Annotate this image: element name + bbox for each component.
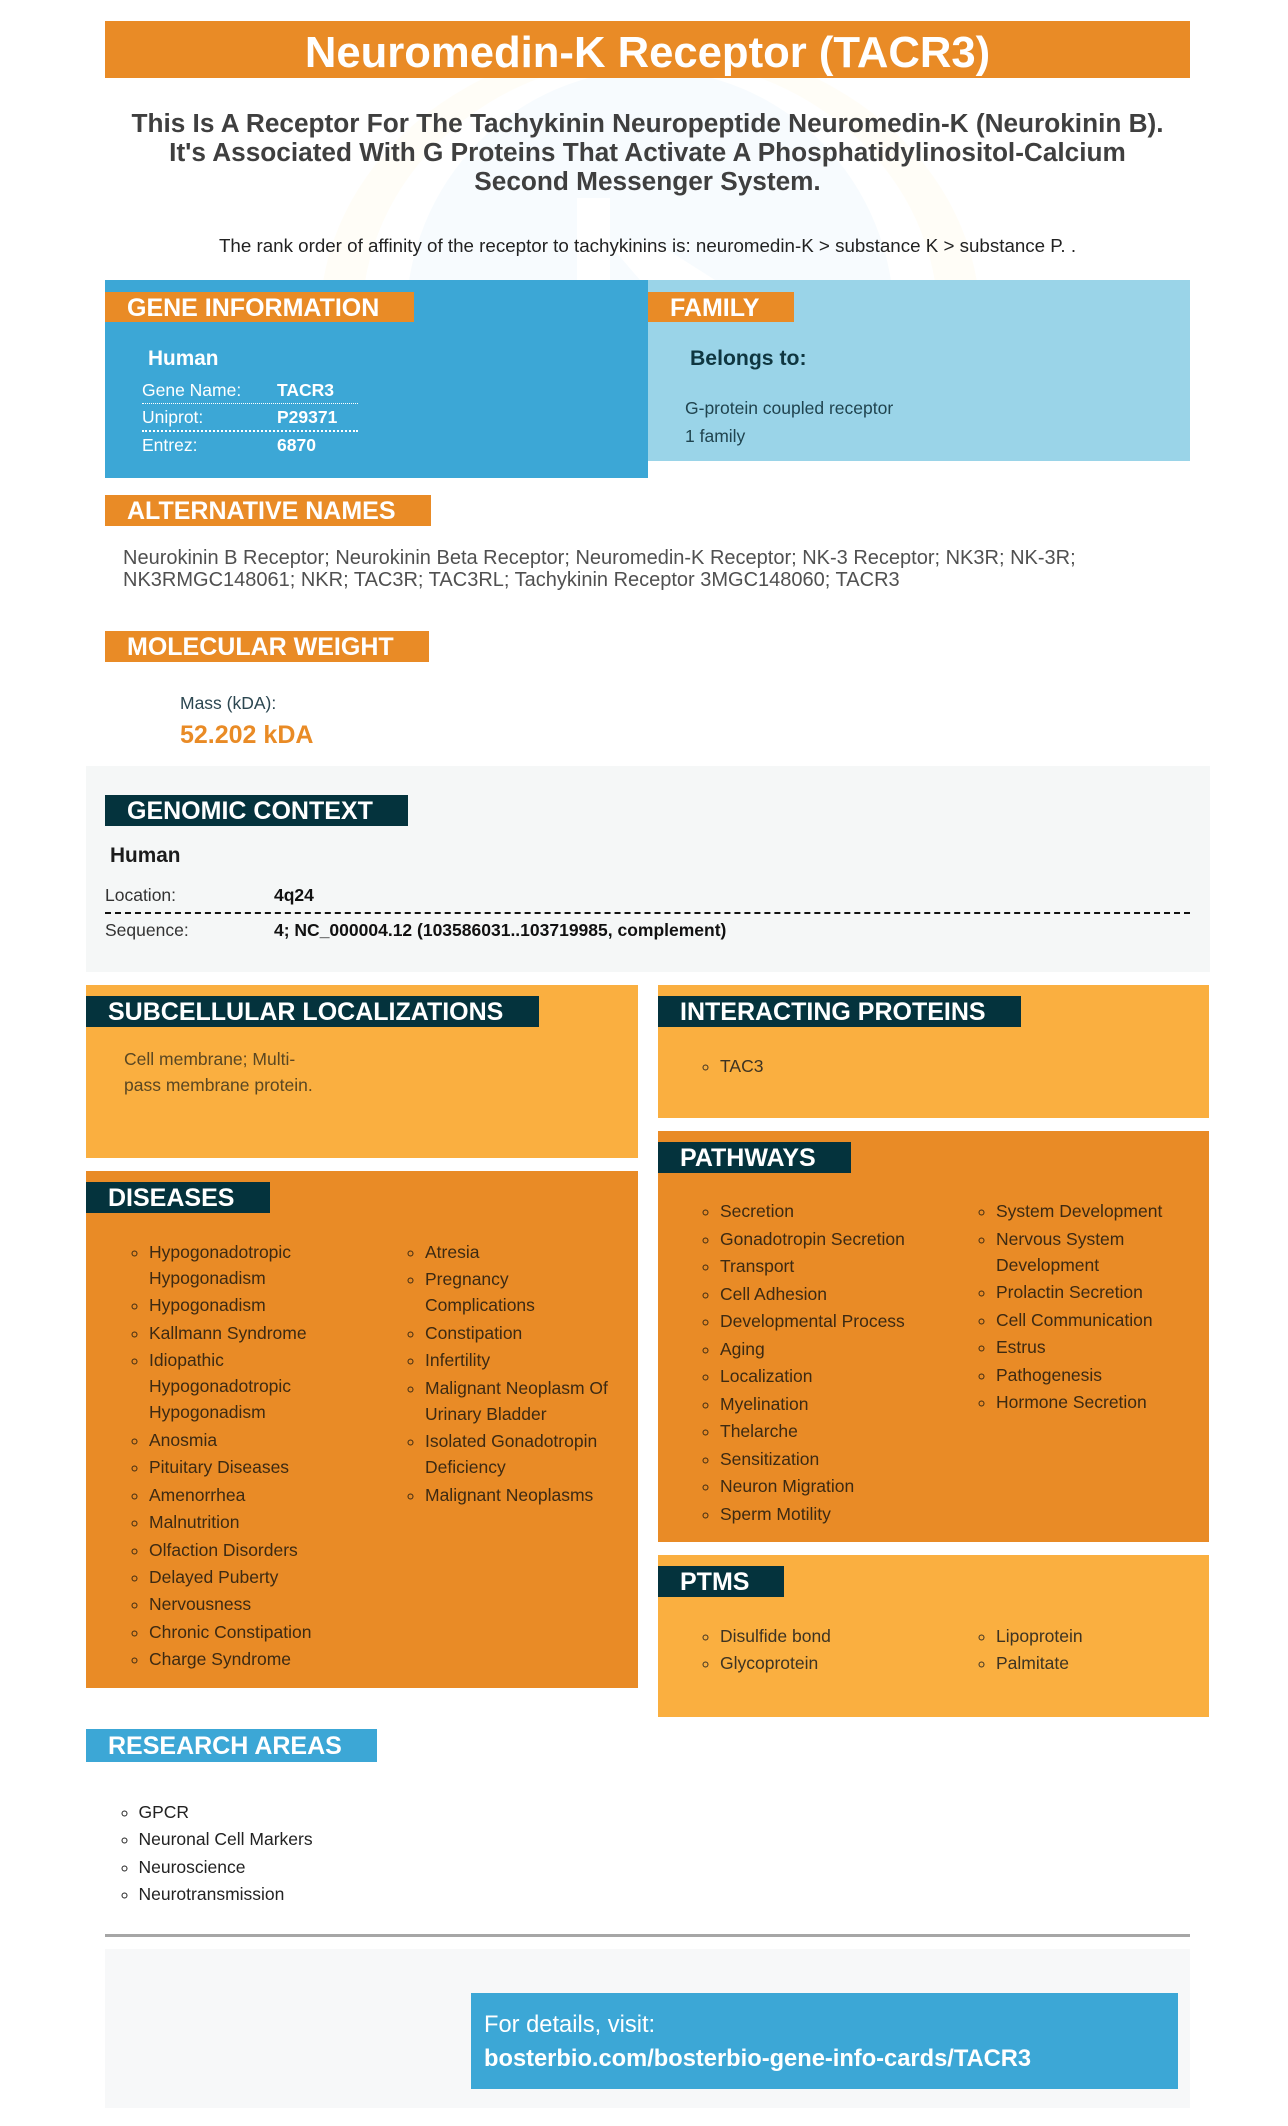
alternative names text (123, 547, 1076, 591)
localization text: Cell membrane; Multi- (124, 1049, 295, 1069)
title: Neuromedin-K Receptor (TACR3) (305, 28, 990, 77)
list: pathways column 1: Secretion (720, 1201, 794, 1221)
list: diseases column 1: Idiopathic Hypogonadotropic Hypogonadism (149, 1350, 291, 1422)
list: ptms column 1: Disulfide bond (720, 1626, 831, 1646)
heading: ptms (658, 1566, 784, 1597)
list: pathways column 2: Cell Communication (996, 1310, 1153, 1330)
location row: 4q24 (274, 885, 314, 905)
location row: Location: (105, 885, 176, 905)
family text: 1 family (685, 426, 745, 446)
panel: diseases (86, 1171, 638, 1688)
heading: research areas (86, 1729, 377, 1762)
localization text (124, 1049, 313, 1095)
list: diseases column 2: Constipation (425, 1323, 522, 1343)
list: ptms column 2: Lipoprotein (996, 1626, 1083, 1646)
alternative names text: Neurokinin B Receptor; Neurokinin Beta Receptor; Neuromedin-K Receptor; NK-3 Receptor; NK3R; NK-3R; (123, 547, 1076, 569)
list: pathways column 1: Localization (720, 1366, 812, 1386)
footer panel (105, 1949, 1190, 2108)
list: pathways column 1: Gonadotropin Secretion (720, 1229, 905, 1249)
list: diseases column 1: Hypogonadotropic Hypogonadism (149, 1242, 291, 1288)
list: pathways column 1 (702, 1201, 905, 1524)
heading: alternative names: ALTERNATIVE NAMES (127, 497, 396, 525)
heading: diseases: DISEASES (108, 1184, 234, 1212)
heading: gene information: GENE INFORMATION (127, 294, 379, 322)
gene table: Gene Name: (142, 380, 241, 400)
title (105, 21, 1190, 78)
localization text: pass membrane protein. (124, 1075, 313, 1095)
subtitle (131, 108, 1164, 196)
callout label: For details, visit: (484, 2012, 655, 2038)
list: diseases column 1: Pituitary Diseases (149, 1457, 289, 1477)
list: research areas: Neuronal Cell Markers (138, 1829, 313, 1849)
panel: ptms (658, 1555, 1209, 1717)
heading: subcellular localizations: SUBCELLULAR LOCALIZATIONS (108, 998, 503, 1026)
gene table: Entrez: (142, 435, 197, 455)
mass label: Mass (kDA): (180, 693, 276, 713)
list: diseases column 1: Malnutrition (149, 1512, 239, 1532)
list: diseases column 1: Anosmia (149, 1430, 217, 1450)
list: pathways column 2: Pathogenesis (996, 1365, 1102, 1385)
list: diseases column 1: Amenorrhea (149, 1485, 245, 1505)
family text (685, 398, 893, 446)
gene table: P29371 (277, 407, 337, 427)
list: ptms column 1 (702, 1626, 831, 1673)
list: diseases column 1: Delayed Puberty (149, 1567, 278, 1587)
mass value: 52.202 kDA (180, 721, 313, 749)
heading: ptms: PTMS (680, 1568, 749, 1596)
list: diseases column 1: Nervousness (149, 1594, 251, 1614)
species label: Human (148, 347, 218, 370)
heading: pathways (658, 1142, 851, 1173)
heading: pathways: PATHWAYS (680, 1144, 816, 1172)
list: pathways column 1: Cell Adhesion (720, 1284, 827, 1304)
heading: diseases (86, 1182, 270, 1213)
list: pathways column 1: Neuron Migration (720, 1476, 854, 1496)
panel: gene information (105, 280, 648, 478)
list: diseases column 1: Hypogonadism (149, 1295, 266, 1315)
list: diseases column 2: Atresia (425, 1242, 479, 1262)
list: research areas: Neuroscience (138, 1857, 246, 1877)
gene table: Uniprot: (142, 407, 203, 427)
panel: pathways (658, 1131, 1209, 1542)
list: pathways column 1: Thelarche (720, 1421, 798, 1441)
list: ptms column 1: Glycoprotein (720, 1653, 818, 1673)
list: diseases column 2: Malignant Neoplasm Of Urinary Bladder (425, 1378, 608, 1424)
background watermark (0, 78, 1288, 280)
subtitle: It's Associated With G Proteins That Activate A Phosphatidylinositol-Calcium (169, 137, 1126, 167)
gene table: 6870 (277, 435, 316, 455)
list: ptms column 2 (978, 1626, 1083, 1673)
sequence row: Sequence: (105, 920, 189, 940)
list: pathways column 1: Developmental Process (720, 1311, 905, 1331)
heading: genomic context: GENOMIC CONTEXT (127, 797, 373, 825)
list: diseases column 2: Malignant Neoplasms (425, 1485, 593, 1505)
panel: interacting proteins (658, 985, 1209, 1118)
list: pathways column 2: Prolactin Secretion (996, 1282, 1143, 1302)
location row (105, 885, 314, 905)
list: pathways column 2: Estrus (996, 1337, 1046, 1357)
subtitle: Second Messenger System. (474, 166, 821, 196)
list: diseases column 1: Olfaction Disorders (149, 1540, 298, 1560)
panel: family (648, 280, 1190, 461)
gene table (142, 380, 358, 455)
sequence row: 4; NC_000004.12 (103586031..103719985, complement) (274, 920, 726, 940)
list: diseases column 1 (132, 1242, 311, 1669)
list: pathways column 1: Sensitization (720, 1449, 819, 1469)
list: diseases column 1: Charge Syndrome (149, 1649, 291, 1669)
heading: family: FAMILY (670, 294, 759, 322)
heading: research areas: RESEARCH AREAS (108, 1732, 342, 1760)
list: interacting proteins: TAC3 (720, 1056, 763, 1076)
list: pathways column 1: Transport (720, 1256, 794, 1276)
list: diseases column 1: Kallmann Syndrome (149, 1323, 307, 1343)
callout url: bosterbio.com/bosterbio-gene-info-cards/TACR3 (484, 2046, 1031, 2072)
callout: details link (471, 1993, 1178, 2089)
subtitle: This Is A Receptor For The Tachykinin Neuropeptide Neuromedin-K (Neurokinin B). (131, 108, 1164, 138)
heading: molecular weight: MOLECULAR WEIGHT (127, 633, 394, 661)
list: diseases column 2: Isolated Gonadotropin Deficiency (425, 1431, 597, 1477)
list: research areas: Neurotransmission (138, 1884, 284, 1904)
panel: genomic context (86, 766, 1210, 972)
list: pathways column 2: System Development (996, 1201, 1162, 1221)
alternative names text: NK3RMGC148061; NKR; TAC3R; TAC3RL; Tachykinin Receptor 3MGC148060; TACR3 (123, 569, 900, 591)
list: pathways column 1: Myelination (720, 1394, 809, 1414)
list: pathways column 2: Hormone Secretion (996, 1392, 1147, 1412)
list: research areas: GPCR (138, 1802, 189, 1822)
list: diseases column 2 (408, 1242, 608, 1505)
gene table: TACR3 (277, 380, 334, 400)
intro text: The rank order of affinity of the receptor to tachykinins is: neuromedin-K > substance K > substance P. . (219, 235, 1076, 256)
list: pathways column 1: Aging (720, 1339, 765, 1359)
belongs to label: Belongs to: (690, 347, 807, 370)
list: diseases column 1: Chronic Constipation (149, 1622, 311, 1642)
list: diseases column 2: Infertility (425, 1350, 490, 1370)
list: pathways column 2 (978, 1201, 1162, 1412)
heading: family (648, 292, 794, 322)
panel: subcellular localizations (86, 985, 638, 1158)
list: ptms column 2: Palmitate (996, 1653, 1069, 1673)
species label: Human (110, 844, 180, 867)
list: research areas (122, 1802, 313, 1904)
list: diseases column 2: Pregnancy Complications (425, 1269, 535, 1315)
heading: interacting proteins: INTERACTING PROTEINS (680, 998, 986, 1026)
family text: G-protein coupled receptor (685, 398, 893, 418)
list: pathways column 2: Nervous System Development (996, 1229, 1124, 1275)
list: pathways column 1: Sperm Motility (720, 1504, 831, 1524)
